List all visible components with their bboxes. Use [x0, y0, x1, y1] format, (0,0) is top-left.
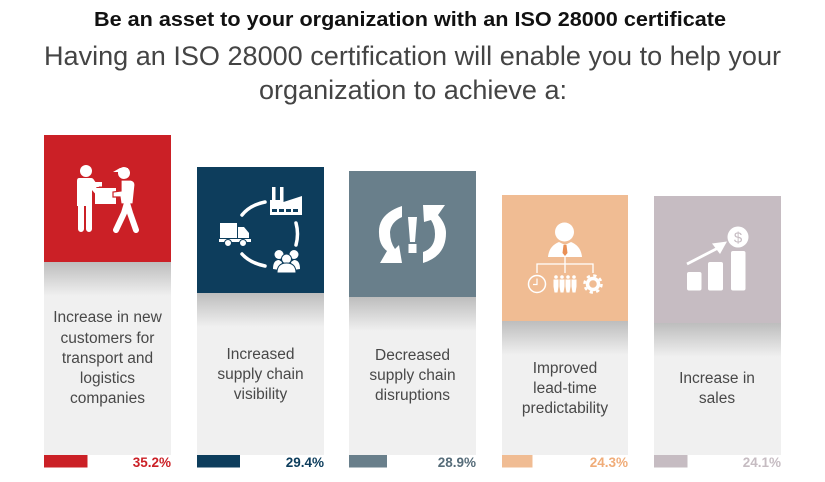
- progress bar: [44, 455, 88, 468]
- icon: rising bar chart with dollar coin: [687, 226, 748, 290]
- subtitle: organization to achieve a:: [259, 75, 567, 105]
- value: 28.9%: [438, 455, 476, 470]
- description: [522, 360, 608, 417]
- value: 29.4%: [286, 455, 324, 470]
- description: supply chain: [217, 366, 304, 383]
- description: [369, 347, 456, 404]
- description: companies: [70, 390, 145, 407]
- value: 24.1%: [743, 455, 781, 470]
- description: Improved: [533, 360, 597, 377]
- icon: supply cycle with factory, people and truck: [219, 187, 302, 273]
- progress bar: [197, 455, 240, 468]
- description: visibility: [234, 386, 287, 403]
- progress bar: [502, 455, 532, 468]
- description: customers for: [61, 330, 154, 347]
- title: Be an asset to your organization with an ISO 28000 certificate: [94, 8, 726, 31]
- description: [217, 346, 304, 403]
- value: 35.2%: [133, 455, 171, 470]
- panel: new customers 35.2%: [44, 135, 171, 470]
- description: transport and: [62, 350, 153, 367]
- description: Increase in: [679, 370, 755, 387]
- description: [53, 309, 163, 407]
- panel: supply chain visibility 29.4%: [197, 167, 324, 470]
- icon: circular arrows with exclamation mark: [379, 205, 446, 263]
- description: lead-time: [533, 380, 597, 397]
- value: 24.3%: [590, 455, 628, 470]
- description: logistics: [80, 370, 135, 387]
- progress bar: [349, 455, 387, 468]
- description: disruptions: [375, 387, 450, 404]
- subtitle: [44, 41, 781, 105]
- description: Decreased: [375, 347, 450, 364]
- icon: two people handing over a parcel: [77, 165, 136, 230]
- icon: rising bar chart with dollar coin: $: [734, 230, 743, 246]
- description: [679, 370, 755, 407]
- progress bar: [654, 455, 688, 468]
- panel: supply chain disruptions 28.9%: [349, 171, 476, 470]
- panel: increase in sales 24.1%: [654, 196, 781, 470]
- icon: manager with clock, team and gear: [528, 222, 602, 292]
- description: sales: [699, 390, 735, 407]
- panel: lead-time predictability 24.3%: [502, 195, 628, 470]
- subtitle: Having an ISO 28000 certification will enable you to help your: [44, 41, 781, 71]
- description: Increase in new: [53, 309, 163, 326]
- description: supply chain: [369, 367, 456, 384]
- description: predictability: [522, 400, 608, 417]
- description: Increased: [226, 346, 295, 363]
